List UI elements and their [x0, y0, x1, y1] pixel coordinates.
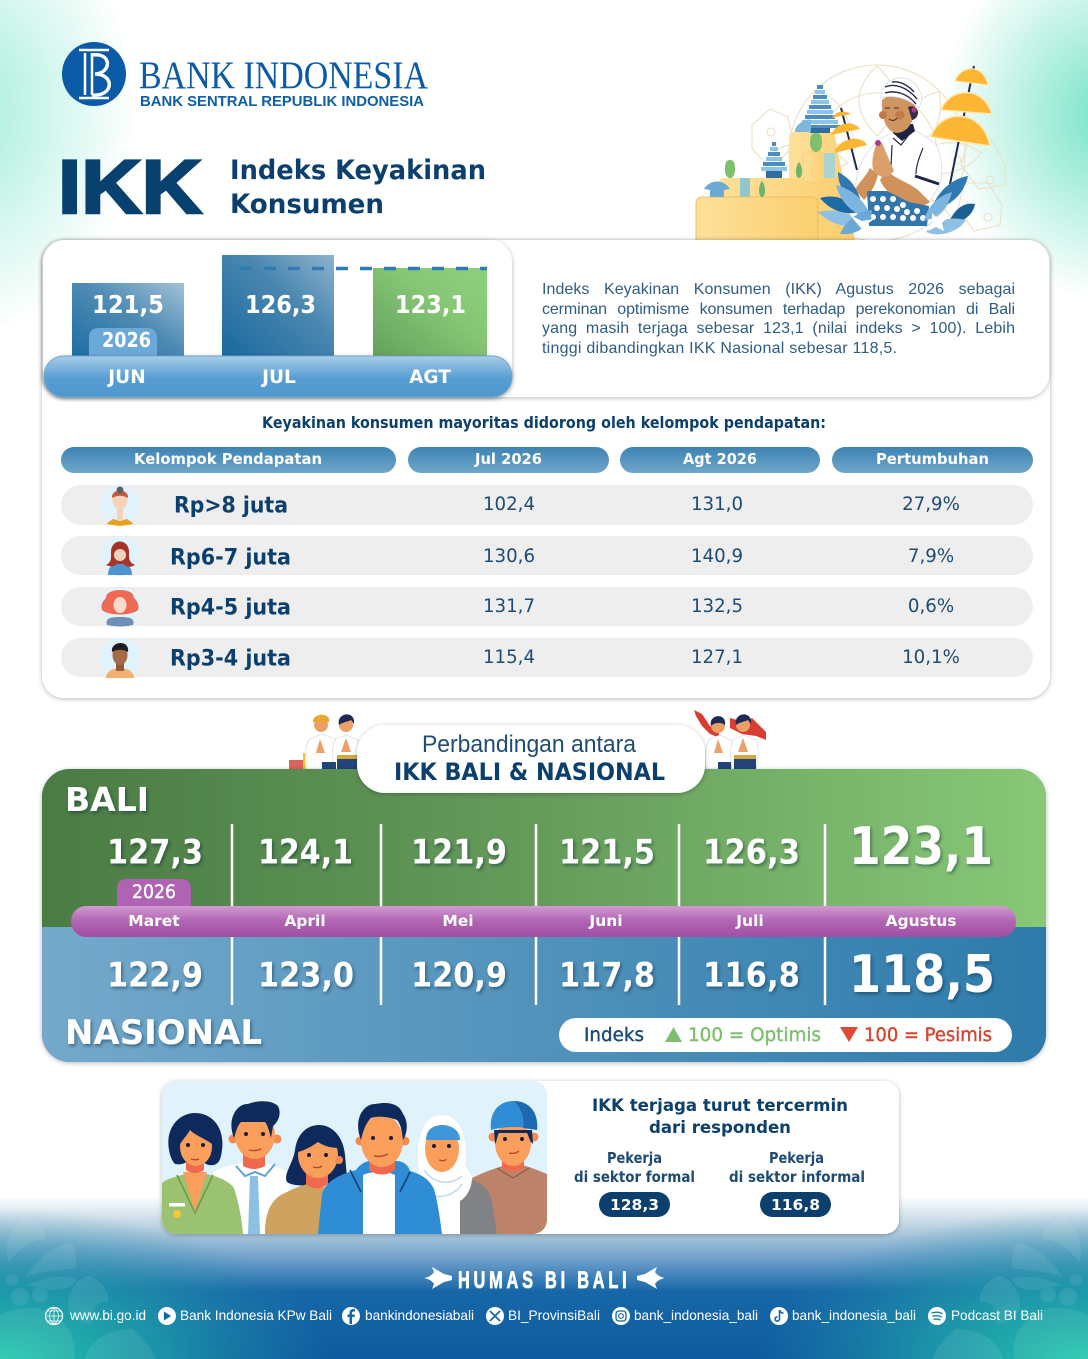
panel: main white card: [42, 240, 1050, 698]
temple blocks: [696, 85, 855, 248]
footer: social media links: [46, 1307, 1043, 1325]
icon: avatar woman red hair: [100, 536, 140, 576]
month ribbon: AGT: [409, 367, 451, 388]
leaves: [818, 172, 975, 235]
table row: Rp>8 juta: Rp>8 juta: [174, 492, 288, 518]
footer heading: Humas BI Bali: HUMAS BI BALI: [458, 1267, 627, 1294]
year tab 2026: [117, 879, 191, 908]
table row: Rp4-5 juta: 0,6%: [908, 596, 954, 617]
National values: 123,0: [258, 956, 354, 996]
table header: Jul 2026: [474, 450, 542, 468]
illustration: group of workers: [162, 1081, 547, 1234]
National values: 120,9: [411, 956, 507, 996]
stat: informal sector: [729, 1149, 865, 1217]
table row: Rp4-5 juta: 132,5: [691, 596, 743, 617]
TikTok: bank_indonesia_bali: [792, 1307, 916, 1323]
YouTube: Bank Indonesia KPw Bali: [180, 1307, 332, 1323]
title: IKK: IKK: [58, 145, 202, 230]
illustration: Indonesia map and couple: [694, 710, 766, 769]
table row: Rp3-4 juta: [61, 638, 1033, 678]
bar: JUN: 2026: [102, 328, 151, 352]
woman uniform: [162, 1113, 243, 1234]
bar: AGT: 123,1: [395, 290, 466, 319]
footer heading: Humas BI Bali: [424, 1267, 665, 1294]
month ribbon: JUN: [106, 367, 146, 388]
stat: formal sector: [574, 1149, 695, 1217]
legend: 100 = Optimis: [688, 1024, 821, 1046]
Bali values: 124,1: [258, 832, 353, 872]
table header: Pertumbuhan: [876, 450, 989, 468]
panel: respondents: [162, 1081, 899, 1234]
panel: description strip: [43, 240, 1049, 397]
month band: Mei: [442, 912, 474, 930]
website: www.bi.go.id: [69, 1307, 146, 1323]
man white shirt: [213, 1101, 290, 1234]
table row: Rp6-7 juta: 140,9: [691, 546, 743, 567]
Bali values: 127,3: [107, 832, 203, 872]
Spotify: [928, 1307, 1043, 1325]
month ribbon: [44, 356, 512, 397]
text: description paragraph: [542, 281, 1015, 357]
month band: Juli: [735, 912, 764, 930]
title pill: Perbandingan: IKK BALI & NASIONAL: [394, 758, 665, 786]
Spotify: Podcast BI Bali: [951, 1307, 1043, 1323]
website: [46, 1307, 146, 1324]
subtitle: Indeks Keyakinan Konsumen: [230, 155, 486, 220]
Bali values: 126,3: [703, 832, 800, 872]
bar: JUL: 126,3: [245, 290, 316, 319]
text: respondents title: IKK terjaga turut tercermin: [592, 1095, 848, 1115]
bar: AGT: [373, 268, 487, 358]
table heading: Keyakinan konsumen mayoritas didorong oleh kelompok pendapatan:: [262, 413, 826, 432]
month band: Agustus: [885, 912, 957, 930]
stat: formal sector: 128,3: [610, 1196, 659, 1214]
title pill: Perbandingan: Perbandingan antara: [422, 731, 637, 758]
subtitle: Indeks Keyakinan Konsumen: Konsumen: [230, 189, 384, 220]
logo: Bank Indonesia: [62, 42, 428, 110]
table row: Rp3-4 juta: Rp3-4 juta: [170, 646, 291, 672]
legend: 100 = Pesimis: [864, 1024, 992, 1046]
table row: Rp6-7 juta: 7,9%: [908, 546, 954, 567]
Instagram: bank_indonesia_bali: [634, 1307, 758, 1323]
text: description paragraph: yang masih terjaga sebesar 123,1 (nilai indeks > 100). Lebih: [542, 320, 1015, 337]
stat: informal sector: 116,8: [771, 1196, 820, 1214]
bar: JUN: 121,5: [92, 290, 164, 319]
Bali values: 121,9: [411, 832, 507, 872]
woman khaki: [265, 1125, 347, 1234]
Bali values: [107, 817, 993, 877]
month ribbon: JUL: [260, 367, 296, 388]
stat: informal sector: di sektor informal: [729, 1168, 865, 1186]
table row: Rp6-7 juta: 130,6: [483, 546, 535, 567]
table header: Kelompok Pendapatan: [134, 450, 322, 468]
text: respondents title: dari responden: [649, 1117, 791, 1137]
table row: Rp>8 juta: 27,9%: [902, 494, 960, 515]
worker with cap: [472, 1101, 547, 1234]
table row: Rp4-5 juta: [61, 587, 1033, 627]
Facebook: bankindonesiabali: [365, 1307, 474, 1323]
text: respondents title: [592, 1095, 848, 1137]
table header: Agt 2026: [683, 450, 757, 468]
logo: Bank Indonesia: BANK INDONESIA: [139, 54, 428, 97]
illustration: Bali couple: [289, 714, 360, 769]
National values: [107, 945, 995, 1005]
table row: Rp6-7 juta: [61, 536, 1033, 576]
title pill: Perbandingan: [357, 725, 705, 793]
label: BALI: BALI: [65, 780, 149, 819]
stat: informal sector: Pekerja: [769, 1149, 824, 1167]
table row: Rp4-5 juta: Rp4-5 juta: [170, 594, 291, 620]
table row: Rp3-4 juta: 127,1: [691, 647, 743, 668]
month band: Juni: [588, 912, 623, 930]
table row: Rp6-7 juta: Rp6-7 juta: [170, 544, 291, 570]
Bali values: 123,1: [849, 817, 993, 877]
table header: [61, 447, 1033, 473]
label: NASIONAL: NASIONAL: [65, 1013, 262, 1053]
man: [855, 78, 942, 226]
table row: Rp>8 juta: 102,4: [483, 494, 535, 515]
X: BI_ProvinsiBali: [508, 1307, 600, 1323]
table row: Rp3-4 juta: 10,1%: [902, 647, 960, 668]
bar: JUL: [222, 255, 334, 358]
icon: avatar woman curly hair: [100, 587, 140, 627]
month band: Maret: [128, 912, 180, 930]
text: description paragraph: cerminan optimisme konsumen terhadap perekonomian di Bali: [542, 301, 1015, 318]
National values: 118,5: [849, 945, 995, 1005]
parasols: [831, 66, 992, 184]
text: description paragraph: tinggi dibandingkan IKK Nasional sebesar 118,5.: [542, 340, 897, 357]
illustration: Balinese man and temple: [696, 65, 1005, 248]
icon: avatar man dark hair: [100, 638, 140, 678]
bar: JUN: [72, 283, 184, 358]
Bali values: 121,5: [559, 832, 655, 872]
text: description paragraph: Indeks Keyakinan Konsumen (IKK) Agustus 2026 sebagai: [542, 281, 1015, 298]
table row: Rp>8 juta: 131,0: [691, 494, 743, 515]
National values: 117,8: [559, 956, 655, 996]
National values: 122,9: [107, 956, 203, 996]
woman hijab: [418, 1115, 497, 1234]
subtitle: Indeks Keyakinan Konsumen: Indeks Keyakinan: [230, 155, 486, 186]
man blue hoodie: [318, 1103, 442, 1234]
panel: bar chart: [43, 240, 512, 397]
stat: formal sector: Pekerja: [607, 1149, 662, 1167]
legend: Indeks: [584, 1024, 644, 1046]
legend: [559, 1018, 1012, 1052]
logo: Bank Indonesia: BANK SENTRAL REPUBLIK INDONESIA: [140, 93, 424, 110]
month band: April: [284, 912, 326, 930]
table row: Rp3-4 juta: 115,4: [483, 647, 535, 668]
icon: avatar woman with bun: [100, 485, 140, 526]
National values: 116,8: [703, 956, 800, 996]
panel: Bali vs national comparison: [42, 769, 1046, 1062]
month band: [71, 906, 1016, 937]
table row: Rp>8 juta: [61, 485, 1033, 526]
stat: formal sector: di sektor formal: [574, 1168, 695, 1186]
table row: Rp4-5 juta: 131,7: [483, 596, 535, 617]
year tab 2026: 2026: [132, 881, 176, 903]
